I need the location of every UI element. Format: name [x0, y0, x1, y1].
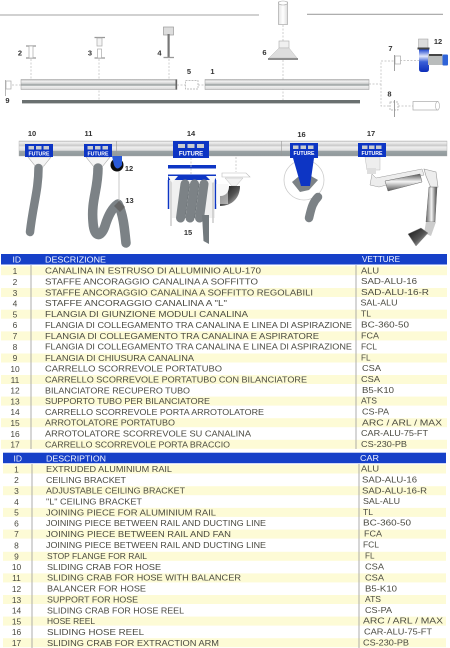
rows: Italian: CSA — [362, 363, 381, 373]
rows: English: 8 — [14, 540, 19, 550]
item 5 joining flange — [186, 67, 198, 89]
item 17 extraction arm: 17 — [367, 129, 375, 138]
rows: Italian: CARRELLO SCORREVOLE PORTATUBO CON BILANCIATORE — [45, 374, 307, 384]
table: Italian — [1, 254, 447, 450]
rows: Italian: 9 — [13, 353, 18, 363]
rows: English: CSA — [365, 562, 384, 572]
rows: Italian: CARRELLO SCORREVOLE PORTA ARROTOLATORE — [45, 407, 264, 417]
rows: English: 16 — [12, 627, 21, 637]
table header: Italian: VETTURE — [362, 254, 400, 264]
item 17 extraction arm: FUTURE — [361, 151, 383, 157]
item 2 ceiling bracket — [18, 46, 36, 58]
rows: Italian: FLANGIA DI GIUNZIONE MODULI CANALINA — [45, 309, 248, 319]
item 7 flange for fan: 7 — [388, 44, 393, 53]
rows: Italian: BILANCIATORE RECUPERO TUBO — [45, 385, 191, 395]
rows: English: B5-K10 — [365, 583, 397, 593]
rows: English: 9 — [14, 551, 19, 561]
rows: English: "L" CEILING BRACKET — [46, 496, 142, 506]
rows: Italian: 3 — [13, 288, 18, 298]
rows: English: 3 — [14, 486, 19, 496]
rows: English: 11 — [12, 573, 21, 583]
rows: English: FCA — [364, 528, 382, 538]
item 10 trolley and hose: FUTURE — [28, 152, 50, 158]
rows: Italian: BC-360-50 — [361, 319, 409, 329]
table header: English: ID — [14, 453, 22, 463]
rows: Italian: TL — [361, 308, 371, 318]
rows: English: CAR-ALU-75-FT — [364, 626, 432, 636]
rows: English: SAL-ALU — [363, 496, 400, 506]
rows: English: SAD-ALU-16-R — [362, 485, 427, 495]
item 9 stop flange: 9 — [5, 96, 10, 105]
rows: Italian: 15 — [10, 418, 20, 428]
table header: English: CAR — [360, 453, 379, 463]
rows: English: 2 — [14, 475, 19, 485]
table header: Italian — [1, 254, 447, 264]
items 14 and 15 hose reel: 14 — [187, 129, 196, 138]
long rail — [19, 141, 447, 156]
table header: Italian: DESCRIZIONE — [45, 254, 106, 264]
rail section left — [21, 80, 177, 90]
rows: English: EXTRUDED ALUMINIUM RAIL — [46, 464, 172, 474]
rows: Italian: FLANGIA DI CHIUSURA CANALINA — [45, 353, 194, 363]
rows: Italian — [10, 265, 443, 450]
rows: English — [12, 464, 444, 648]
rows: Italian: CARRELLO SCORREVOLE PORTA BRACCIO — [45, 439, 231, 449]
rows: English: JOINING PIECE BETWEEN RAIL AND DUCTING LINE — [46, 540, 266, 550]
rows: Italian: CS-PA — [362, 406, 389, 416]
exploded rail diagram — [0, 1, 448, 117]
item 17 extraction arm — [358, 129, 438, 246]
rows: Italian: FLANGIA DI COLLEGAMENTO TRA CANALINA E LINEA DI ASPIRAZIONE — [45, 342, 352, 352]
item 16 sliding hose reel: FUTURE — [293, 151, 315, 157]
rows: English: 10 — [12, 562, 21, 572]
rows: Italian: FCA — [361, 330, 379, 340]
item 5 joining flange: 5 — [187, 67, 191, 76]
rows: English: SLIDING CRAB FOR HOSE REEL — [47, 605, 184, 615]
rows: English: BC-360-50 — [363, 518, 411, 528]
rows: English: ATS — [365, 594, 381, 604]
rows: Italian: ATS — [361, 396, 377, 406]
rows: Italian: 17 — [10, 440, 20, 450]
item 4 L bracket: 4 — [157, 48, 162, 58]
rows: English: ADJUSTABLE CEILING BRACKET — [46, 486, 185, 496]
item 9 stop flange — [5, 80, 11, 105]
rows: Italian: 2 — [13, 277, 18, 287]
rows: English: ARC / ARL / MAX — [363, 616, 444, 626]
rows: Italian: CARRELLO SCORREVOLE PORTATUBO — [45, 364, 223, 374]
rows: Italian: ARROTOLATORE PORTATUBO — [45, 418, 176, 428]
item 11 trolley and hose: FUTURE — [87, 152, 109, 158]
rows: English: 1 — [14, 464, 19, 474]
rows: English: SLIDING CRAB FOR HOSE — [47, 562, 161, 572]
rows: Italian: ARROTOLATORE SCORREVOLE SU CANALINA — [45, 428, 251, 438]
rows: Italian: FL — [361, 352, 371, 362]
rows: Italian: 8 — [13, 342, 18, 352]
rows: English: CS-230-PB — [363, 637, 409, 647]
rows: Italian: SUPPORTO TUBO PER BILANCIATORE — [45, 396, 210, 406]
rows: English: SAD-ALU-16 — [362, 474, 417, 484]
item 16 sliding hose reel — [284, 130, 324, 218]
rows: English: FL — [365, 551, 375, 561]
rows: Italian: 4 — [13, 299, 18, 309]
item 12 balancer: 12 — [125, 164, 133, 173]
rows: English: HOSE REEL — [47, 616, 95, 626]
item 12 balancer — [110, 156, 133, 201]
rows: English: JOINING PIECE FOR ALUMINIUM RAIL — [46, 507, 216, 517]
rows: English: TL — [363, 507, 373, 517]
rows: English: 4 — [14, 497, 19, 507]
rows: Italian: 16 — [10, 429, 20, 439]
items 14 and 15 hose reel — [168, 129, 217, 244]
label 1: 1 — [210, 67, 215, 76]
table: English — [3, 453, 446, 648]
rows: Italian: STAFFE ANCORAGGIO CANALINA A SOFFITTO — [45, 276, 259, 286]
rows: English: SLIDING CRAB FOR HOSE WITH BALANCER — [47, 573, 241, 583]
rows: Italian: CS-230-PB — [361, 439, 407, 449]
rows: Italian: 6 — [13, 320, 18, 330]
item 6 duct and flange — [262, 1, 298, 60]
rows: Italian: CSA — [361, 374, 380, 384]
rows: English: CEILING BRACKET — [46, 475, 126, 485]
rows: Italian: FLANGIA DI COLLEGAMENTO TRA CANALINA E LINEA DI ASPIRAZIONE — [45, 320, 352, 330]
item 3 adjustable bracket — [88, 38, 105, 58]
rows: English: 12 — [12, 584, 21, 594]
item 8 flange and duct: 8 — [387, 90, 392, 98]
lower rail bar — [22, 100, 360, 103]
item 3 adjustable bracket: 3 — [88, 48, 92, 58]
rows: Italian: 1 — [13, 266, 18, 276]
item 4 L bracket — [157, 27, 174, 58]
rows: English: SLIDING HOSE REEL — [47, 627, 144, 637]
table header: English — [3, 453, 446, 463]
rows: English: JOINING PIECE BETWEEN RAIL AND FAN — [46, 529, 231, 539]
item 11 trolley and hose: 11 — [85, 129, 92, 138]
rows: English: 17 — [12, 638, 21, 648]
rows: Italian: FCL — [361, 341, 377, 351]
rows: Italian: ALU — [361, 265, 379, 275]
items 14 and 15 hose reel: 15 — [184, 228, 192, 237]
item 7 flange for fan — [388, 44, 400, 71]
rows: English: 15 — [12, 616, 21, 626]
item 10 trolley and hose — [25, 129, 53, 232]
rows: Italian: 5 — [13, 309, 18, 319]
rows: English: SLIDING CRAB FOR EXTRACTION ARM — [47, 638, 219, 648]
rows: Italian: FLANGIA DI COLLEGAMENTO TRA CANALINA E ASPIRATORE — [45, 331, 319, 341]
item 6 duct and flange: 6 — [262, 48, 267, 57]
table header: Italian: ID — [12, 254, 21, 264]
dashed connectors to fan and duct — [369, 60, 419, 106]
item 12 fan: 12 — [434, 37, 442, 46]
rows: Italian: STAFFE ANCORAGGIO CANALINA A SOFFITTO REGOLABILI — [45, 287, 313, 297]
rows: English: CS-PA — [365, 605, 392, 615]
side joint with dark hose — [216, 157, 250, 206]
rows: English: STOP FLANGE FOR RAIL — [47, 551, 147, 561]
rows: English: SUPPORT FOR HOSE — [47, 594, 138, 604]
rows: Italian: STAFFE ANCORAGGIO CANALINA A "L" — [45, 298, 227, 308]
rows: English: 7 — [14, 529, 19, 539]
rows: English: 13 — [12, 595, 21, 605]
rows: Italian: ARC / ARL / MAX — [362, 417, 443, 427]
rows: Italian: CANALINA IN ESTRUSO DI ALLUMINIO ALU-170 — [45, 266, 261, 276]
items 14 and 15 hose reel: FUTURE — [179, 152, 203, 158]
rows: Italian: SAL-ALU — [360, 298, 398, 308]
rows: English: 14 — [12, 606, 21, 616]
item 2 ceiling bracket: 2 — [18, 48, 22, 58]
item 11 trolley and hose — [84, 129, 126, 243]
rows: English: 5 — [14, 508, 19, 518]
rows: Italian: 12 — [10, 386, 20, 396]
trolley assembly diagram — [19, 129, 447, 246]
table header: English: DESCRIPTION — [46, 453, 106, 463]
rows: Italian: 14 — [10, 407, 20, 417]
rows: English: ALU — [361, 464, 379, 474]
item 10 trolley and hose: 10 — [28, 129, 36, 138]
rows: Italian: B5-K10 — [362, 385, 394, 395]
item 12 fan — [418, 37, 448, 72]
rows: Italian: SAD-ALU-16-R — [361, 287, 429, 297]
rows: English: FCL — [363, 540, 379, 550]
rows: Italian: 11 — [11, 375, 20, 385]
rows: Italian: SAD-ALU-16 — [361, 276, 417, 286]
rows: Italian: 7 — [13, 331, 18, 341]
rows: English: BALANCER FOR HOSE — [47, 584, 146, 594]
rows: Italian: 10 — [10, 364, 20, 374]
rail section right — [205, 80, 369, 90]
rows: Italian: 13 — [10, 396, 20, 406]
rows: English: 6 — [14, 518, 19, 528]
rows: Italian: CAR-ALU-75-FT — [361, 428, 428, 438]
item 16 sliding hose reel: 16 — [297, 130, 306, 139]
item 8 flange and duct — [387, 90, 440, 117]
label 13: 13 — [125, 196, 134, 205]
rows: English: CSA — [365, 572, 384, 582]
rows: English: JOINING PIECE BETWEEN RAIL AND DUCTING LINE — [46, 518, 266, 528]
